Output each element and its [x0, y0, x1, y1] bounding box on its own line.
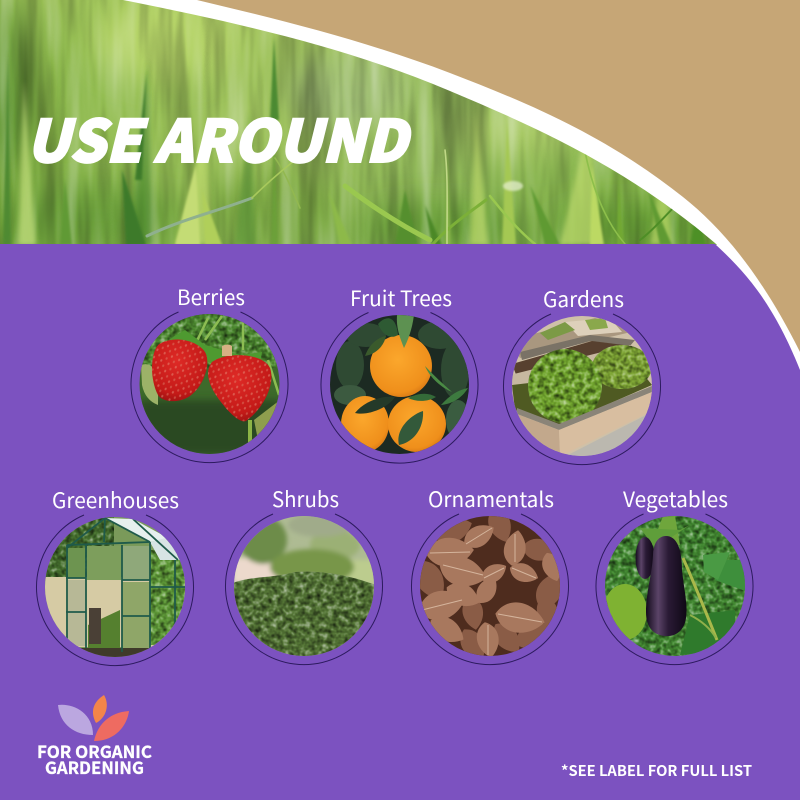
title: USE AROUND — [26, 95, 414, 179]
label: Greenhouses: Greenhouses — [52, 485, 179, 515]
label: Gardens: Gardens — [543, 284, 624, 314]
item: Berries — [131, 282, 288, 463]
logo: for organic gardening — [37, 695, 152, 779]
item: Fruit Trees — [321, 283, 478, 463]
text: for organic: FOR ORGANIC — [37, 738, 152, 763]
photo: strawberries — [139, 313, 280, 455]
ring — [504, 314, 660, 465]
ring — [37, 515, 194, 666]
label: Ornamentals: Ornamentals — [428, 484, 554, 514]
photo: shrubs — [233, 513, 380, 658]
label: Fruit Trees: Fruit Trees — [350, 283, 452, 313]
item: Vegetables — [596, 484, 753, 665]
footnote: *SEE LABEL FOR FULL LIST — [561, 760, 752, 781]
photo: grass header — [0, 0, 800, 245]
label: Berries: Berries — [177, 282, 245, 312]
ring — [596, 514, 753, 665]
ring — [131, 312, 288, 463]
photo: greenhouse — [44, 516, 186, 659]
photo: oranges — [329, 314, 470, 455]
icon: three petals — [58, 695, 129, 741]
label: Vegetables: Vegetables — [623, 484, 728, 514]
item: Greenhouses — [37, 485, 194, 666]
photo: ornamental leaves — [420, 516, 560, 656]
item: Shrubs — [226, 484, 382, 665]
purple background panel — [0, 244, 800, 800]
label: Shrubs: Shrubs — [272, 484, 339, 514]
photo: raised beds — [510, 315, 653, 458]
ring — [226, 514, 382, 665]
text: gardening: GARDENING — [45, 754, 144, 779]
item: Gardens — [504, 284, 660, 465]
photo: eggplants — [603, 515, 748, 657]
ring — [412, 514, 568, 665]
item: Ornamentals — [408, 484, 570, 666]
ring — [321, 312, 478, 463]
